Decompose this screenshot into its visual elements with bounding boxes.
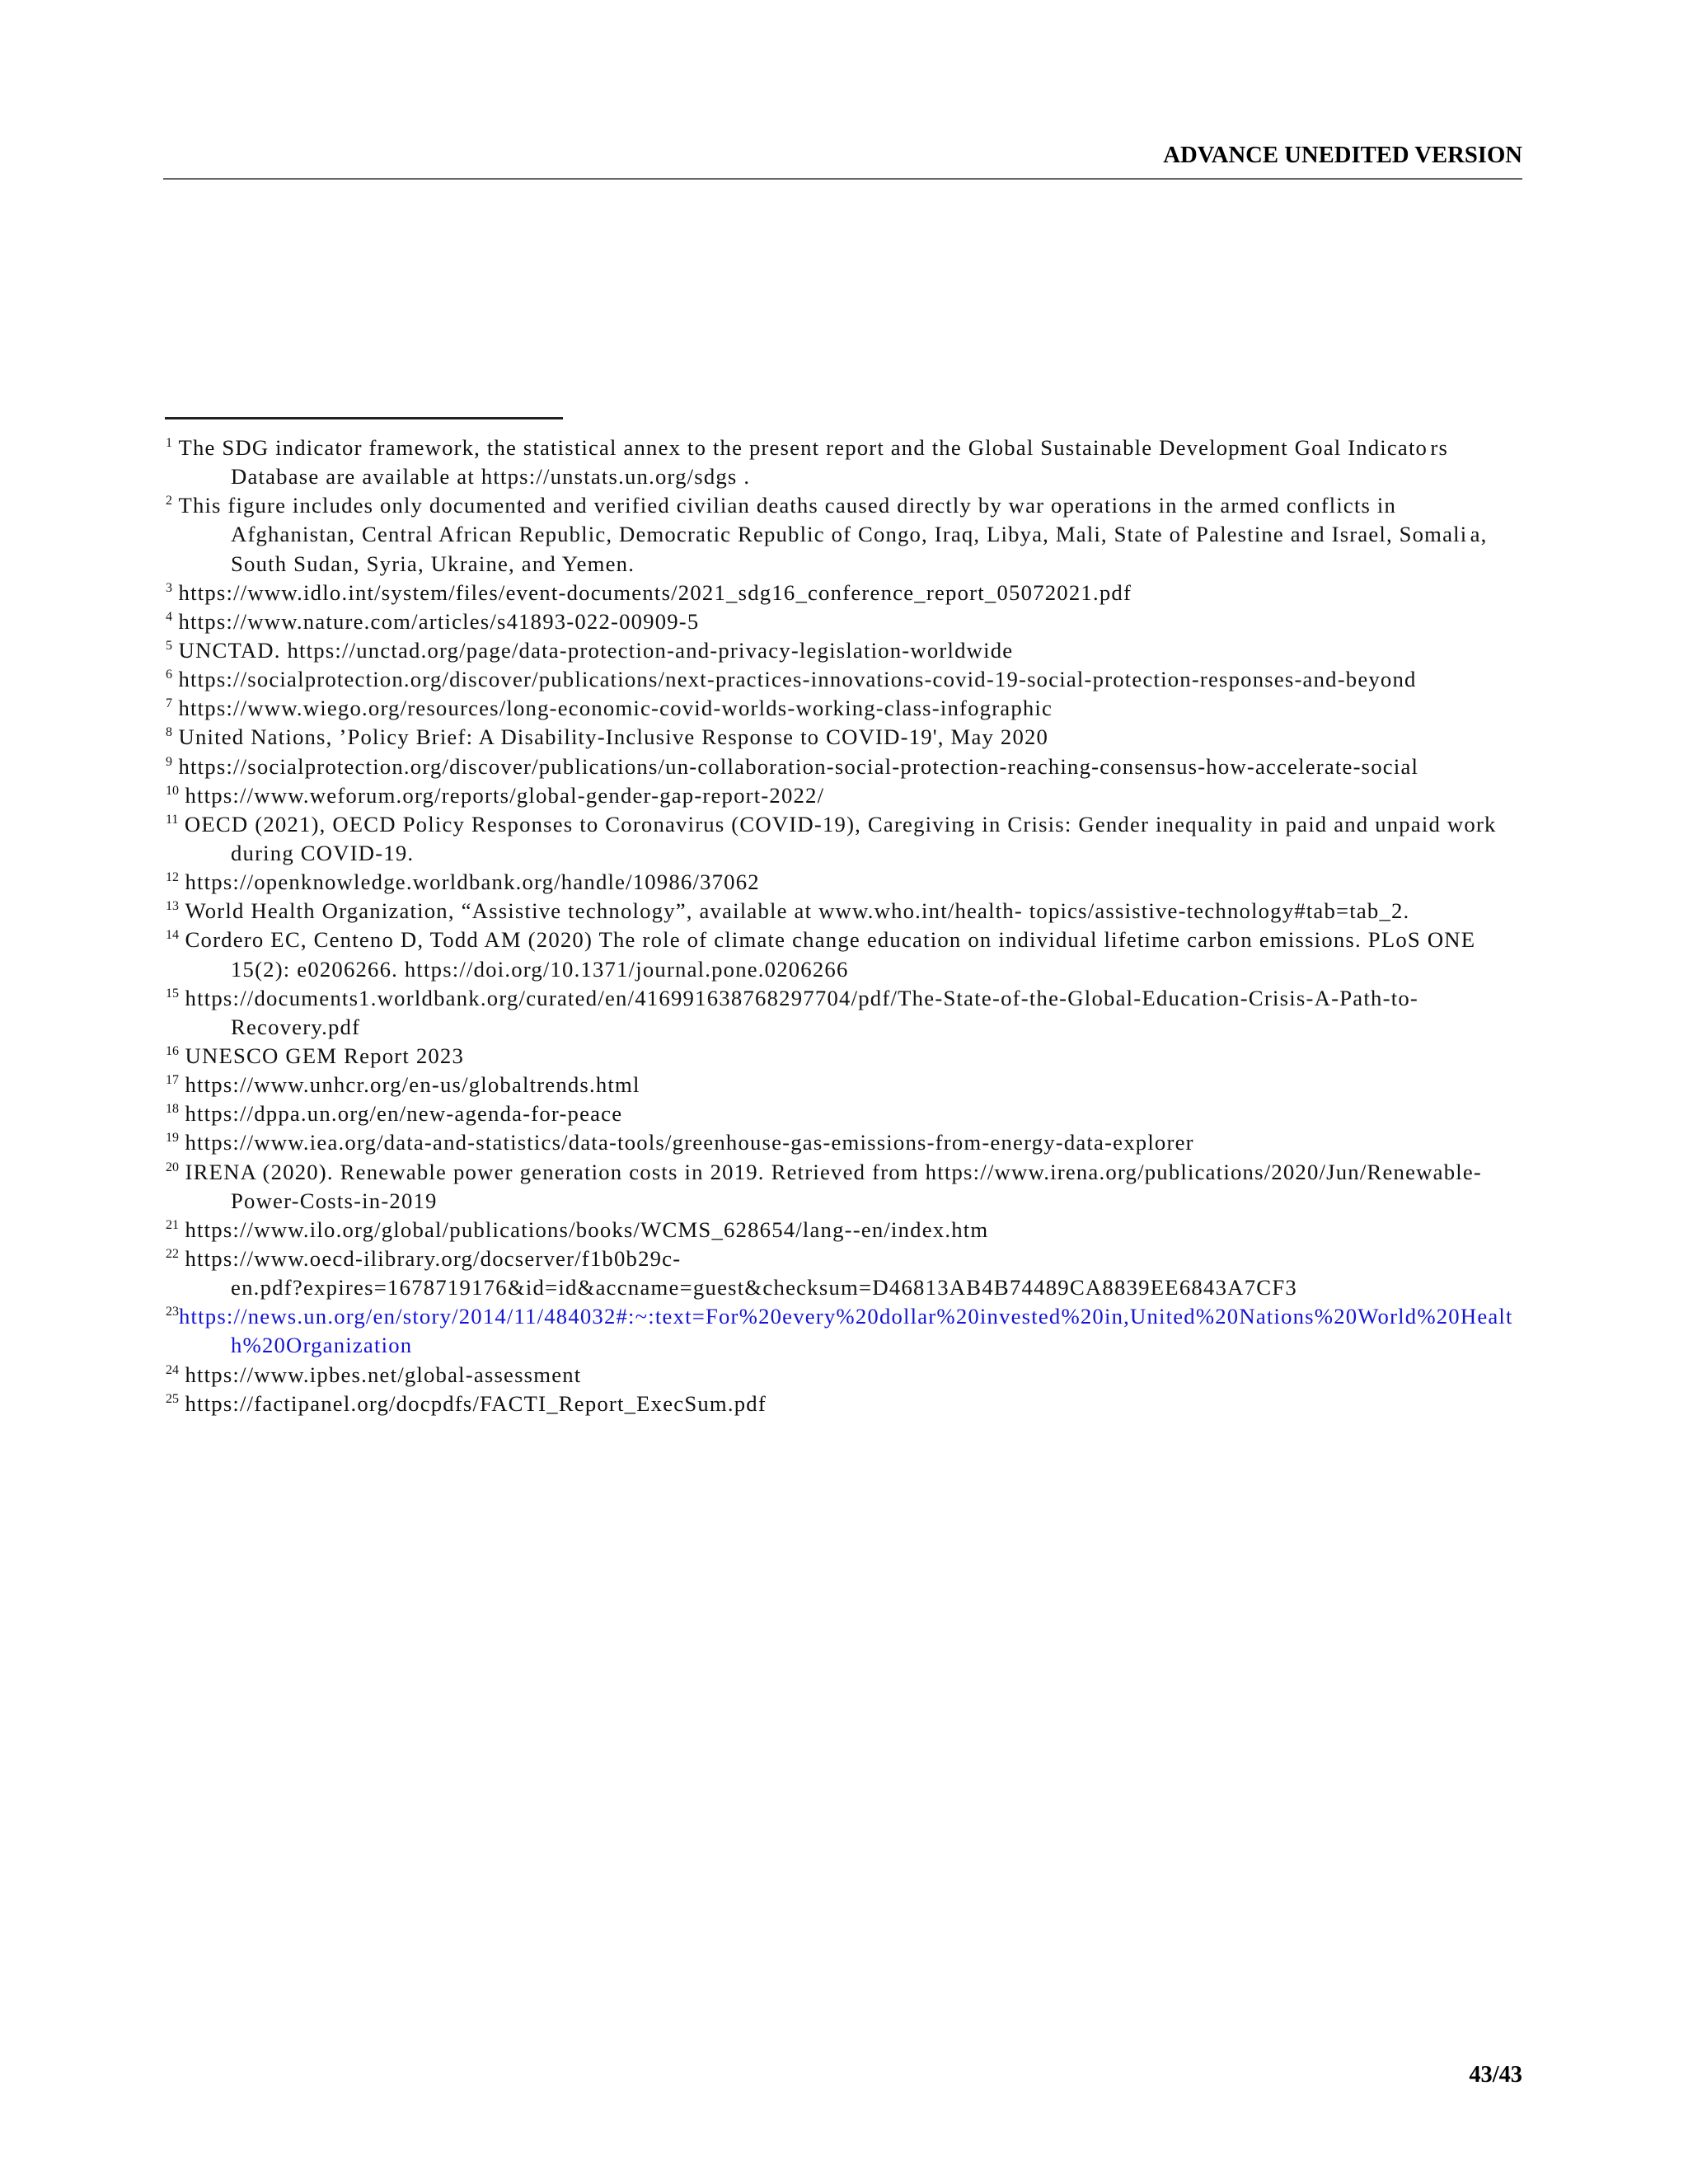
- footnote 15: [166, 986, 1418, 1039]
- footnote 5: 5 UNCTAD. https://unctad.org/page/data-protection-and-privacy-legislation-worldwide: [166, 638, 1013, 663]
- footnotes list: [166, 435, 1513, 1416]
- footnote 2: 2 This figure includes only documented and verified civilian deaths caused directly by war operations in the armed conflicts in: [166, 493, 1396, 518]
- footnote 20: 20 IRENA (2020). Renewable power generation costs in 2019. Retrieved from https://www.irena.org/publications/2020/Jun/Renewable-: [166, 1160, 1482, 1184]
- footnote 22: [166, 1246, 1297, 1300]
- footnote 10: 10 https://www.weforum.org/reports/global-gender-gap-report-2022/: [166, 783, 824, 808]
- footnote 15: 15 https://documents1.worldbank.org/curated/en/416991638768297704/pdf/The-State-of-the-Global-Education-Crisis-A-Path-to-: [166, 986, 1418, 1010]
- footnote 15: Recovery.pdf: [231, 1015, 360, 1039]
- footnote 20: [166, 1160, 1482, 1213]
- footnote 19: 19 https://www.iea.org/data-and-statistics/data-tools/greenhouse-gas-emissions-from-energy-data-explorer: [166, 1130, 1194, 1155]
- footnote 8: 8 United Nations, ’Policy Brief: A Disability-Inclusive Response to COVID-19', May 2020: [166, 724, 1048, 749]
- footnote 14: 14 Cordero EC, Centeno D, Todd AM (2020) The role of climate change education on individual lifetime carbon emissions. PLoS ONE: [166, 927, 1475, 952]
- footnote 9: 9 https://socialprotection.org/discover/publications/un-collaboration-social-protection-reaching-consensus-how-accelerate-social: [166, 754, 1418, 779]
- footnote 14: 15(2): e0206266. https://doi.org/10.1371/journal.pone.0206266: [231, 957, 848, 982]
- footnote 23: [166, 1304, 1513, 1357]
- footnote 1: 1 The SDG indicator framework, the statistical annex to the present report and the Global Sustainable Development Goal Indicato rs: [166, 435, 1448, 460]
- footnote 3: 3 https://www.idlo.int/system/files/event-documents/2021_sdg16_conference_report_05072021.pdf: [166, 580, 1132, 605]
- footnote 17: 17 https://www.unhcr.org/en-us/globaltrends.html: [166, 1072, 640, 1097]
- footnote 12: 12 https://openknowledge.worldbank.org/handle/10986/37062: [166, 869, 760, 894]
- footnote 22: 22 https://www.oecd-ilibrary.org/docserver/f1b0b29c-: [166, 1246, 681, 1271]
- footnote 13: 13 World Health Organization, “Assistive technology”, available at www.who.int/health- topics/assistive-technology#tab=tab_2.: [166, 898, 1409, 923]
- footnote 2: South Sudan, Syria, Ukraine, and Yemen.: [231, 551, 635, 576]
- footnote 23: 23https://news.un.org/en/story/2014/11/484032#:~:text=For%20every%20dollar%20invested%20in,United%20Nations%20World%20Healt: [166, 1304, 1513, 1329]
- footnote 7: 7 https://www.wiego.org/resources/long-economic-covid-worlds-working-class-infographic: [166, 696, 1053, 720]
- footnote 20: Power-Costs-in-2019: [231, 1188, 438, 1213]
- footnote 11: 11 OECD (2021), OECD Policy Responses to Coronavirus (COVID-19), Caregiving in Crisis: Gender inequality in paid and unpaid work: [166, 812, 1497, 837]
- footnote 14: [166, 927, 1475, 982]
- footnote 1: Database are available at https://unstats.un.org/sdgs .: [231, 464, 750, 489]
- footnote 21: 21 https://www.ilo.org/global/publications/books/WCMS_628654/lang--en/index.htm: [166, 1217, 988, 1242]
- footnote 22: en.pdf?expires=1678719176&id=id&accname=guest&checksum=D46813AB4B74489CA8839EE6843A7CF3: [231, 1275, 1297, 1300]
- footnote 16: 16 UNESCO GEM Report 2023: [166, 1043, 464, 1068]
- footnote 18: 18 https://dppa.un.org/en/new-agenda-for-peace: [166, 1101, 622, 1126]
- footnote 25: 25 https://factipanel.org/docpdfs/FACTI_Report_ExecSum.pdf: [166, 1391, 767, 1416]
- footnote 2: [166, 493, 1487, 576]
- footnote 24: 24 https://www.ipbes.net/global-assessment: [166, 1361, 581, 1386]
- footnote 4: 4 https://www.nature.com/articles/s41893-022-00909-5: [166, 609, 699, 634]
- footnote 2: Afghanistan, Central African Republic, Democratic Republic of Congo, Iraq, Libya, Mali, State of Palestine and Israel, Somali a,: [231, 522, 1487, 546]
- page number: 43/43: [1469, 2062, 1522, 2088]
- header: document status: ADVANCE UNEDITED VERSION: [1163, 142, 1522, 168]
- footnote 11: [166, 812, 1497, 865]
- footnote 1: [166, 435, 1448, 489]
- footnote 6: 6 https://socialprotection.org/discover/publications/next-practices-innovations-covid-19-social-protection-responses-and-beyond: [166, 667, 1417, 691]
- footnote 11: during COVID-19.: [231, 841, 414, 865]
- footnote 23: h%20Organization: [231, 1333, 412, 1357]
